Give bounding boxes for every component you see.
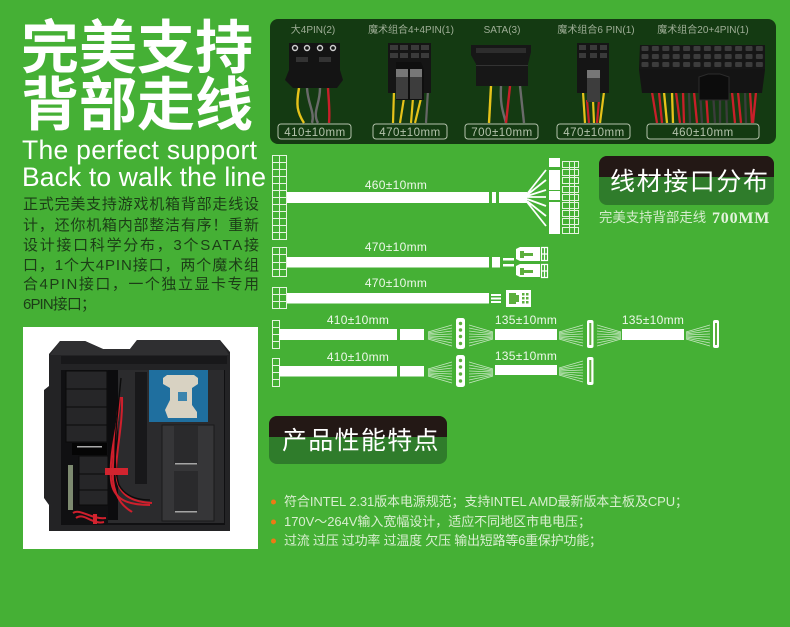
connector: sata xyxy=(471,45,531,123)
back plate xyxy=(108,370,224,523)
description text: 6PIN接口； xyxy=(23,296,96,313)
english subtitle xyxy=(22,135,266,192)
length label: 460±10mm xyxy=(365,178,427,192)
case body xyxy=(44,340,230,531)
heading badge: product features: 产品性能特点 xyxy=(282,427,440,455)
panel: connector overview xyxy=(270,19,776,144)
connector labels: 魔术组合6 PIN(1) xyxy=(557,23,635,36)
length labels: 410±10mm xyxy=(327,313,389,327)
red cables xyxy=(73,397,152,522)
length label: 470±10mm xyxy=(365,240,427,254)
title: 背部走线 xyxy=(21,73,253,138)
connector: 4+4pin xyxy=(388,43,431,123)
title: 完美支持 xyxy=(21,16,253,81)
length labels: 135±10mm xyxy=(495,349,557,363)
length labels: 135±10mm xyxy=(495,313,557,327)
panel: connector overview: 700±10mm xyxy=(471,127,533,139)
subheading: 700mm: 700MM xyxy=(712,210,770,227)
feature list: 符合INTEL 2.31版本电源规范；支持INTEL AMD最新版本主板及CPU； xyxy=(284,494,688,510)
feature list xyxy=(271,494,688,549)
feature list: 过流 过压 过功率 过温度 欠压 输出短路等6重保护功能； xyxy=(284,533,602,549)
connector labels xyxy=(291,23,749,36)
length labels: 410±10mm xyxy=(327,350,389,364)
connector labels: 魔术组合20+4PIN(1) xyxy=(657,23,749,36)
cable: big 4pin and sata chain, lower xyxy=(272,349,594,387)
cable: 4+4pin xyxy=(272,240,548,278)
title xyxy=(21,16,253,138)
description text: 计，还你机箱内部整洁有序！重新 xyxy=(23,217,259,234)
panel: connector overview: 460±10mm xyxy=(672,127,734,139)
panel: connector overview: 470±10mm xyxy=(563,127,625,139)
drive bays xyxy=(66,371,108,505)
heading badge: product features xyxy=(269,416,447,464)
description text: 设计接口科学分布，3个SATA接 xyxy=(23,237,259,254)
connector: 6pin xyxy=(577,43,609,123)
length label: 470±10mm xyxy=(365,276,427,290)
panel: connector overview: 470±10mm xyxy=(379,127,441,139)
connector: 20+4pin xyxy=(639,45,765,123)
description text: 正式完美支持游戏机箱背部走线设 xyxy=(23,196,259,213)
subheading: 700mm: 完美支持背部走线 xyxy=(599,210,706,225)
heading badge: cable layout xyxy=(599,156,774,205)
cable: 6pin xyxy=(272,276,531,308)
motherboard cutout xyxy=(149,370,208,422)
length badges xyxy=(278,124,759,139)
connector: big 4pin xyxy=(285,43,343,123)
connector labels: 大4PIN(2) xyxy=(291,23,335,36)
length labels xyxy=(327,349,557,364)
english subtitle: Back to walk the line xyxy=(22,162,266,192)
cable: big 4pin and sata chain, upper xyxy=(272,313,719,349)
feature list: 170V～264V输入宽幅设计，适应不同地区市电电压； xyxy=(284,514,591,530)
length labels: 135±10mm xyxy=(622,313,684,327)
connector labels: SATA(3) xyxy=(484,25,520,36)
cable: 20+4pin xyxy=(272,156,578,240)
panel: connector overview: 410±10mm xyxy=(284,127,346,139)
heading badge: cable layout: 线材接口分布 xyxy=(610,168,770,196)
description text: 口，1个大4PIN接口，两个魔术组 xyxy=(23,257,259,274)
description text xyxy=(23,196,259,313)
cable ties xyxy=(105,468,128,475)
english subtitle: The perfect support xyxy=(22,135,258,165)
subheading: 700mm xyxy=(599,210,770,227)
connector labels: 魔术组合4+4PIN(1) xyxy=(368,23,454,36)
description text: 合4PIN接口，一个独立显卡专用 xyxy=(23,276,259,293)
cpu backplate xyxy=(163,375,198,418)
length labels xyxy=(327,313,684,327)
panel: computer case photo xyxy=(23,327,258,549)
